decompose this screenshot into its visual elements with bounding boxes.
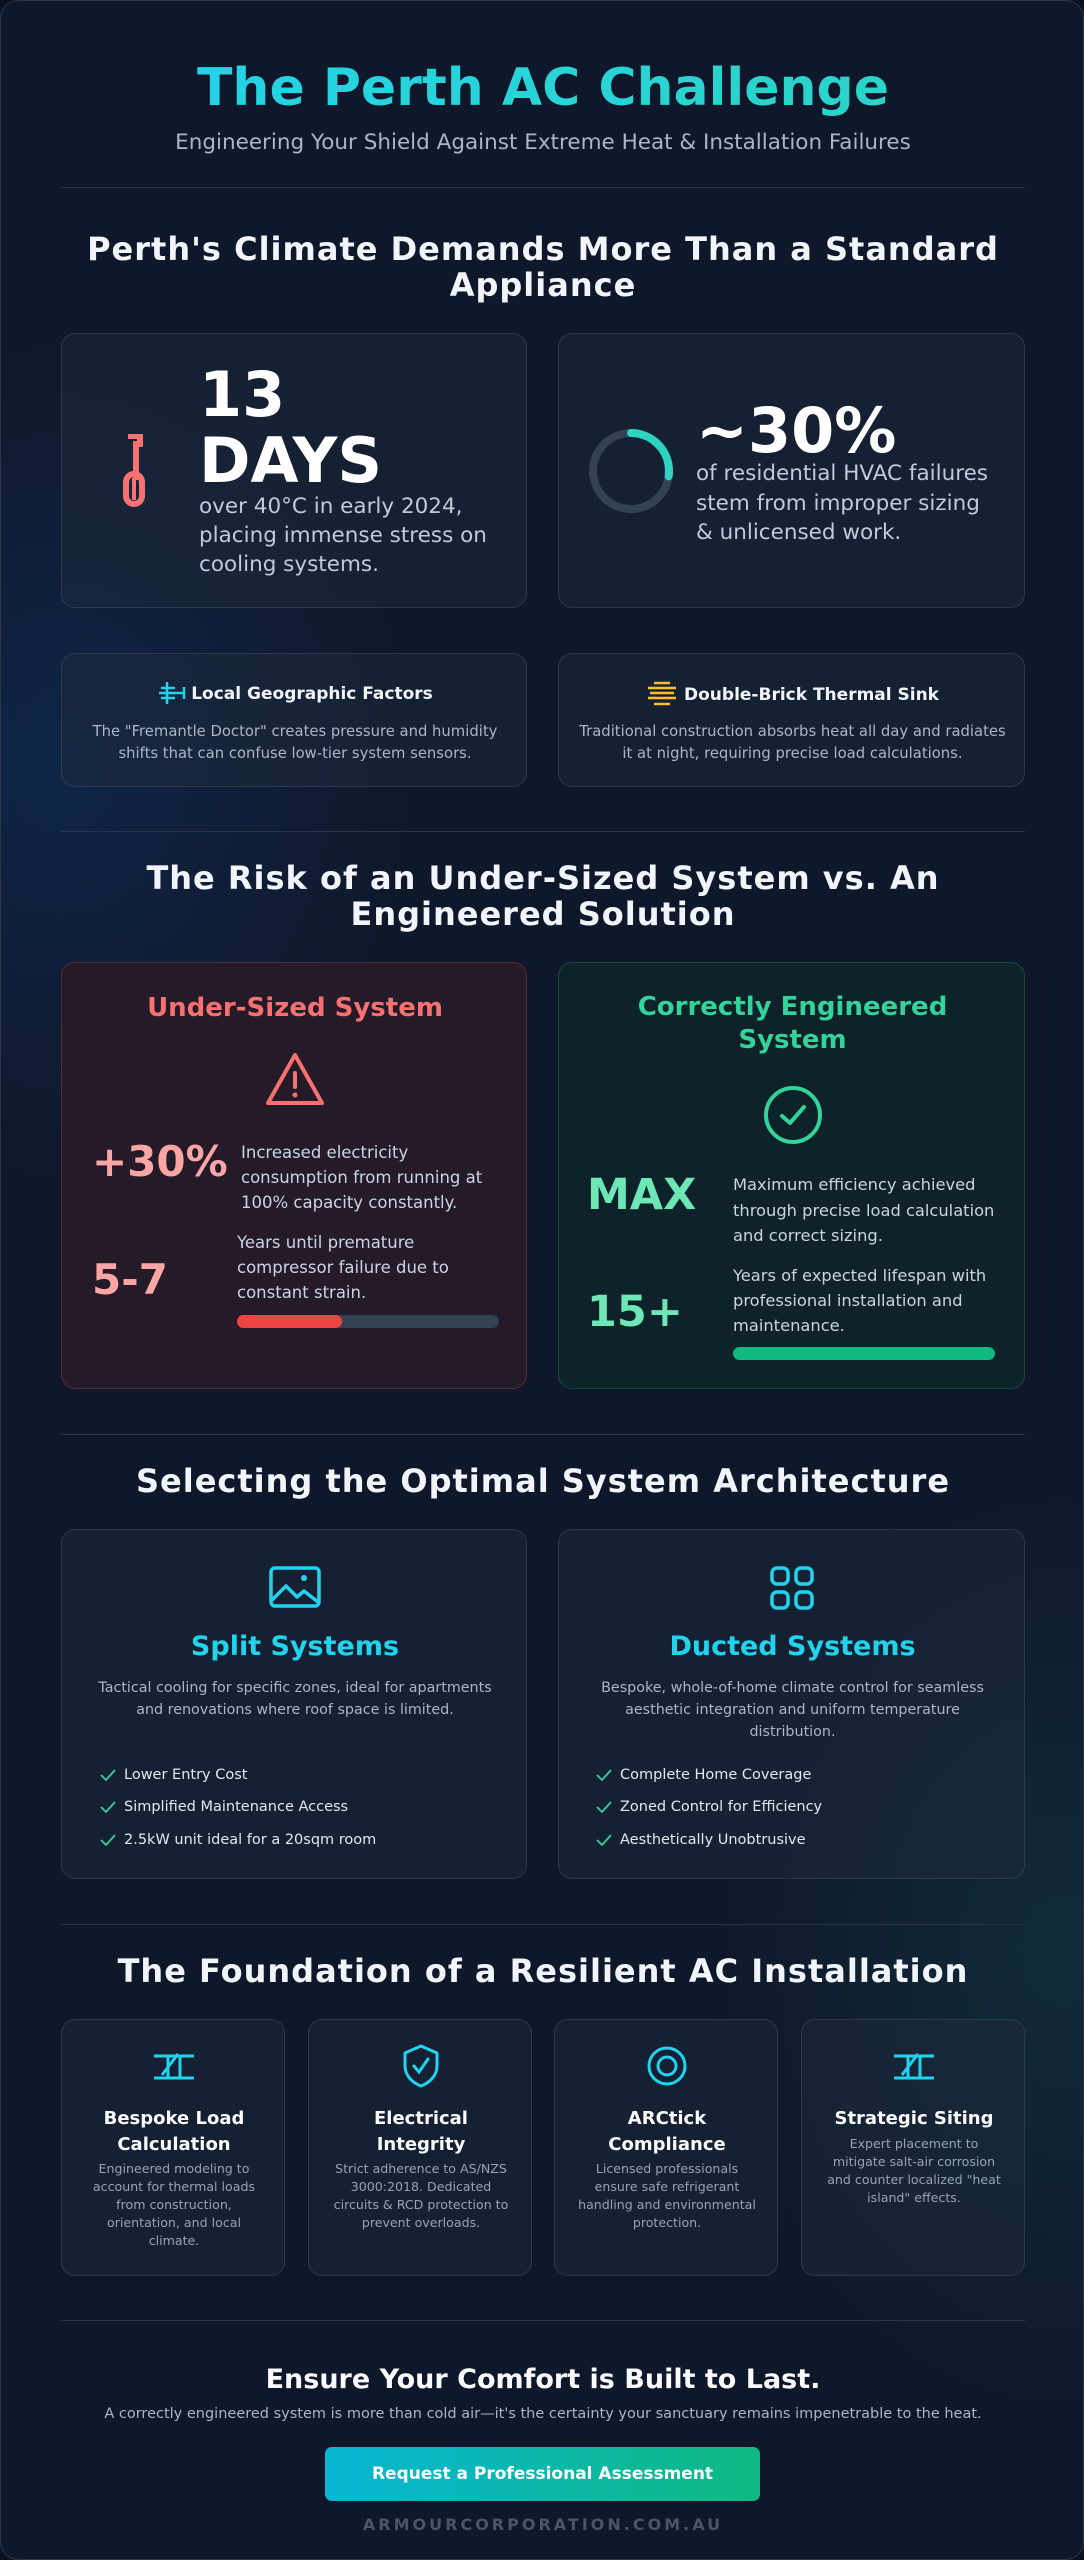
- heading: Correctly Engineered: [638, 992, 947, 1022]
- panel: 30% stat: [558, 333, 1025, 608]
- text: stat description: over 40°C in early 2024, placing immense stress on cooling systems.: [199, 494, 487, 577]
- text: Electrical: [374, 2108, 468, 2129]
- text: Compliance: [608, 2134, 726, 2155]
- text: [93, 2108, 255, 2248]
- checklist: Aesthetically Unobtrusive: [620, 1832, 806, 1848]
- checklist: Lower Entry Cost: [124, 1767, 247, 1783]
- checklist: 2.5kW unit ideal for a 20sqm room: [124, 1832, 376, 1848]
- bar: [237, 1315, 499, 1328]
- heading: architecture: Selecting the Optimal System Architecture: [136, 1462, 950, 1500]
- CTA text: A correctly engineered system is more than cold air—it's the certainty your sanctuary remains impenetrable to the heat.: [104, 2406, 982, 2422]
- heading: Split Systems: [191, 1631, 399, 1662]
- panel: bespoke load calculation: [61, 2019, 285, 2276]
- stat: MAX: MAX: [587, 1170, 696, 1220]
- heading: Under-Sized System: [147, 993, 443, 1023]
- checklist: Simplified Maintenance Access: [124, 1799, 348, 1815]
- icon: shield: [404, 2044, 438, 2088]
- checklist: Zoned Control for Efficiency: [620, 1799, 822, 1815]
- text: Engineered modeling to account for thermal loads from construction, orientation, and local climate.: [93, 2161, 255, 2248]
- heading: risk: The Risk of an Under-Sized System vs. An Engineered Solution: [146, 859, 940, 933]
- panel: split systems: [61, 1529, 527, 1879]
- text: Strategic Siting: [834, 2108, 994, 2129]
- text: ARCtick: [628, 2108, 706, 2129]
- stat: 13 days: [199, 358, 382, 497]
- checklist: [596, 1767, 822, 1848]
- icon: image: [269, 1566, 321, 1608]
- button: Request a Professional Assessment: [372, 2464, 713, 2484]
- stat: +30%: +30%: [92, 1137, 228, 1186]
- text: Bespoke Load: [104, 2108, 244, 2129]
- heading: climate: Perth's Climate Demands More Than a Standard Appliance: [87, 230, 999, 304]
- text: Years of expected lifespan with professional installation and maintenance.: [733, 1266, 986, 1335]
- title: [1, 56, 1084, 120]
- icon: beam: [894, 2053, 934, 2080]
- icon: ring: [648, 2046, 686, 2086]
- text: Expert placement to mitigate salt-air corrosion and counter localized "heat island" effects.: [827, 2136, 1001, 2205]
- icon: grid: [770, 1566, 814, 1610]
- text: Tactical cooling for specific zones, ideal for apartments and renovations where roof space is limited.: [98, 1680, 492, 1718]
- panel: ARCtick compliance: [554, 2019, 778, 2276]
- panel: double-brick thermal sink: [558, 653, 1025, 787]
- text: Bespoke, whole-of-home climate control for seamless aesthetic integration and uniform temperature distribution.: [601, 1680, 984, 1740]
- bar: [733, 1347, 995, 1360]
- text: Calculation: [117, 2134, 231, 2155]
- text: Maximum efficiency achieved through precise load calculation and correct sizing.: [733, 1175, 994, 1245]
- text: Strict adherence to AS/NZS 3000:2018. Dedicated circuits & RCD protection to prevent overloads.: [334, 2161, 508, 2230]
- footer: ARMOURCORPORATION.COM.AU: [363, 2515, 723, 2534]
- button: [325, 2447, 760, 2501]
- heading: System: [738, 1025, 847, 1055]
- stat: 13 days: DAYS: [199, 424, 382, 497]
- stat: 13 days: 13: [199, 358, 285, 431]
- text: [334, 2108, 508, 2230]
- panel: engineered system: [558, 962, 1025, 1389]
- heading: foundation: The Foundation of a Resilient AC Installation: [118, 1952, 968, 1990]
- subtitle: Engineering Your Shield Against Extreme Heat & Installation Failures: [175, 130, 911, 155]
- text: Licensed professionals ensure safe refrigerant handling and environmental protection.: [578, 2161, 756, 2230]
- panel: strategic siting: [801, 2019, 1025, 2276]
- stat: 5-7: 5-7: [92, 1255, 168, 1304]
- icon: warning: [266, 1052, 324, 1105]
- CTA heading: Ensure Your Comfort is Built to Last.: [266, 2364, 820, 2395]
- heading: [638, 992, 947, 1055]
- heading with icon: Double-Brick Thermal Sink: [684, 685, 939, 705]
- icon: thermometer: [123, 434, 145, 507]
- panel: 13 days stat: [61, 333, 527, 608]
- icon: beam: [154, 2053, 194, 2080]
- panel: ducted systems: [558, 1529, 1025, 1879]
- title: The Perth AC Challenge: [197, 58, 889, 118]
- text: Integrity: [377, 2134, 465, 2155]
- text: Years until premature compressor failure due to constant strain.: [237, 1233, 449, 1302]
- heading: Ducted Systems: [669, 1631, 916, 1662]
- panel: electrical integrity: [308, 2019, 532, 2276]
- text: Increased electricity consumption from running at 100% capacity constantly.: [241, 1143, 482, 1212]
- text: The "Fremantle Doctor" creates pressure and humidity shifts that can confuse low-tier system sensors.: [93, 723, 497, 762]
- icon: check circle: [764, 1086, 822, 1144]
- chart: ring: [589, 429, 673, 513]
- stat: ~30%: ~30%: [696, 394, 896, 467]
- heading with icon: Local Geographic Factors: [191, 684, 433, 704]
- text: stat description: of residential HVAC failures stem from improper sizing & unlicensed work.: [696, 461, 988, 545]
- checklist: Complete Home Coverage: [620, 1767, 811, 1783]
- text: Traditional construction absorbs heat all day and radiates it at night, requiring precise load calculations.: [579, 723, 1006, 762]
- checklist: [100, 1767, 376, 1848]
- panel: under-sized system: [61, 962, 527, 1389]
- panel: local geographic factors: [61, 653, 527, 787]
- stat: 15+: 15+: [587, 1287, 683, 1337]
- text: [578, 2108, 756, 2230]
